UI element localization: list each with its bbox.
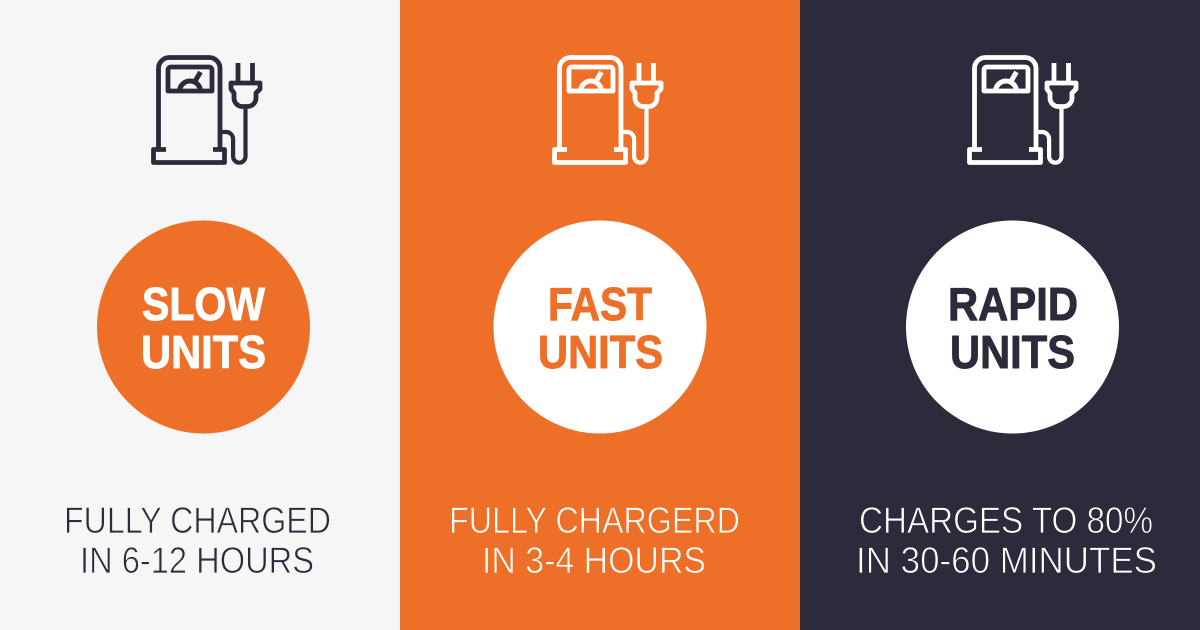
icon: rapid charging station	[970, 57, 1076, 163]
text: slow charge time: FULLY CHARGED	[64, 500, 331, 541]
text: fast charge time	[449, 500, 740, 581]
circle: fast units	[494, 220, 706, 434]
text: fast charge time: IN 3-4 HOURS	[482, 540, 706, 581]
text: fast charge time: FULLY CHARGERD	[449, 500, 740, 541]
heading: fast units: UNITS	[538, 326, 663, 378]
heading: slow units: SLOW	[142, 278, 266, 330]
heading: fast units	[538, 278, 663, 378]
heading: rapid units	[948, 278, 1078, 378]
heading: slow units	[141, 278, 266, 378]
text: rapid charge time: IN 30-60 MINUTES	[856, 540, 1157, 581]
circle: slow units	[97, 220, 310, 434]
heading: slow units: UNITS	[141, 326, 266, 378]
heading: rapid units: UNITS	[950, 326, 1075, 378]
text: slow charge time	[64, 500, 331, 581]
circle: rapid units	[906, 220, 1119, 434]
icon: slow charging station	[154, 57, 260, 163]
text: slow charge time: IN 6-12 HOURS	[80, 540, 314, 581]
panel: slow units	[0, 0, 400, 630]
heading: rapid units: RAPID	[948, 278, 1078, 330]
panel: fast units	[400, 0, 800, 630]
panel: rapid units	[800, 0, 1200, 630]
text: rapid charge time	[856, 500, 1157, 581]
icon: fast charging station	[554, 57, 661, 163]
heading: fast units: FAST	[548, 278, 652, 330]
text: rapid charge time: CHARGES TO 80%	[859, 500, 1153, 541]
